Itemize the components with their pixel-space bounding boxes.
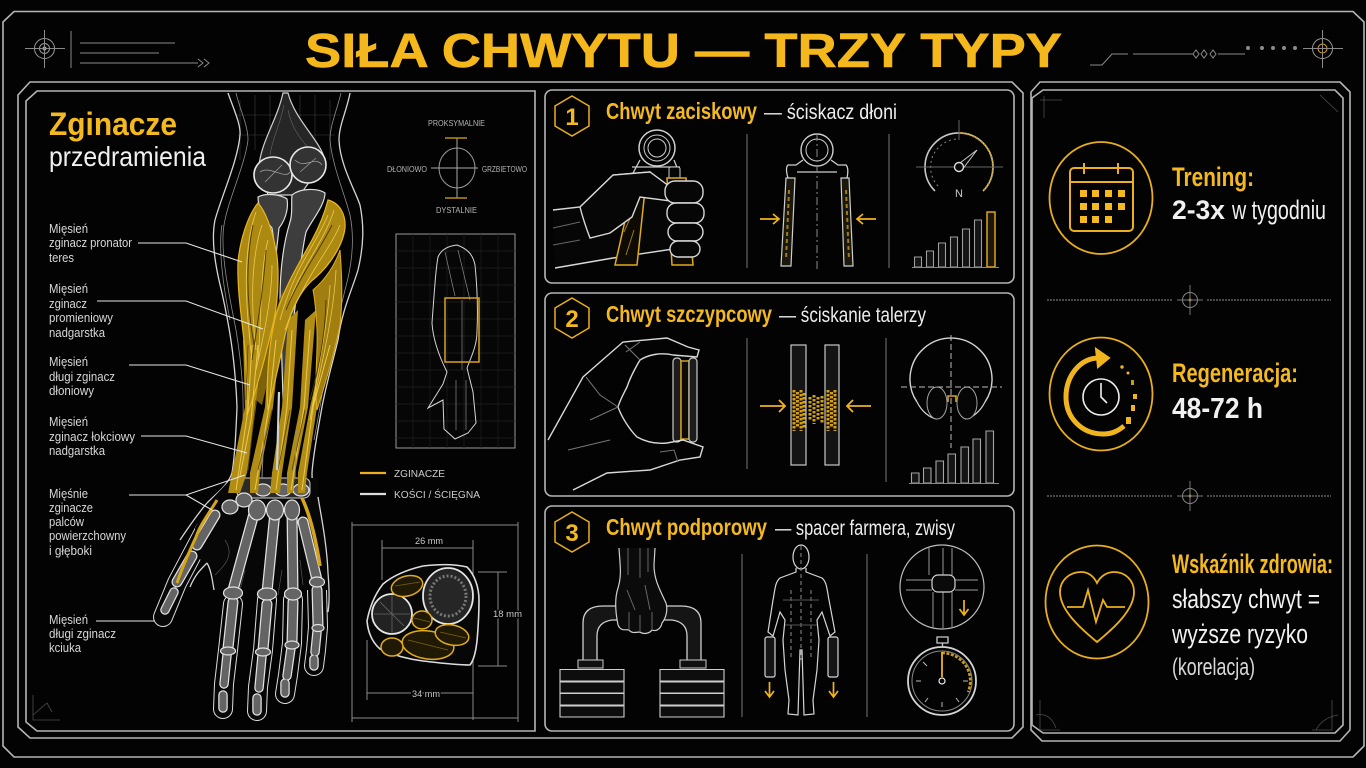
anatomical labels: dłoniowy (49, 384, 95, 398)
anatomical labels: zginacz pronator (49, 236, 132, 250)
title: SIŁA CHWYTU — TRZY TYPY (305, 25, 1062, 78)
legend: KOŚCI / ŚCIĘGNA (394, 488, 480, 501)
badge 2 (555, 298, 589, 338)
legend: ZGINACZE (394, 468, 445, 480)
anatomical labels: zginacz łokciowy (49, 430, 136, 444)
icon: plate compression diagram (760, 345, 871, 465)
divider crosshair (1177, 285, 1203, 315)
icon: recovery clock (1050, 338, 1152, 450)
heading grip 2 (606, 301, 926, 327)
icon: fingertip circle detail (901, 335, 1002, 448)
main outer frame left and centre (18, 82, 1023, 738)
fact: training: w tygodniu (1231, 195, 1326, 225)
orientation compass: GRZBIETOWO (482, 165, 527, 174)
anatomical labels: Mięsień (49, 613, 88, 627)
anatomical forearm illustration (163, 93, 363, 711)
icon: farmer walk handles and weights (560, 548, 724, 717)
bar chart grip 2 (909, 431, 999, 484)
anatomical labels: Mięsień (49, 415, 88, 429)
panel: grip 3 support (545, 506, 1014, 731)
fact: recovery: 48-72 h (1172, 393, 1263, 425)
icon: fist on bar detail (900, 545, 984, 629)
orientation compass: DŁONIOWO (387, 165, 427, 174)
fact: health indicator: (korelacja) (1172, 654, 1255, 681)
anatomical labels: palców (49, 515, 85, 529)
heading grip 1: — ściskacz dłoni (764, 101, 897, 124)
heading: zginacze przedramienia (49, 106, 206, 172)
badge 1 (555, 96, 589, 136)
fact: health indicator: wyższe ryzyko (1171, 619, 1308, 649)
heading: zginacze przedramienia: Zginacze (49, 106, 177, 142)
badge 2: 2 (565, 306, 579, 333)
anatomical labels: zginacze (49, 501, 93, 515)
header decoration left (25, 30, 209, 68)
anatomical labels: nadgarstka (49, 326, 105, 340)
heading grip 2: Chwyt szczypcowy (606, 301, 772, 327)
badge 3 (555, 512, 589, 552)
anatomical labels: długi zginacz (49, 370, 115, 384)
anatomical labels: Mięsień (49, 222, 88, 236)
icon: calendar (1050, 142, 1152, 254)
anatomical labels (49, 222, 263, 655)
bar chart grip 1 (912, 212, 999, 268)
heading grip 3 (606, 514, 955, 540)
forearm cross-section with dimensions (352, 522, 522, 722)
gauge in newtons: N (955, 188, 963, 200)
orientation compass: DYSTALNIE (436, 206, 477, 215)
heading grip 1: Chwyt zaciskowy (606, 98, 757, 124)
legend (360, 468, 480, 501)
anatomical labels: długi zginacz (49, 627, 116, 641)
hand skeleton (163, 478, 329, 711)
heading grip 2: — ściskanie talerzy (779, 304, 926, 327)
anatomical labels: Mięsień (49, 282, 88, 296)
arm locator grid (396, 234, 515, 448)
divider crosshair (1177, 481, 1203, 511)
badge 3: 3 (565, 520, 579, 547)
heading: zginacze przedramienia: przedramienia (49, 141, 206, 172)
panel: grip 2 pinch (545, 293, 1014, 496)
anatomical labels: i głęboki (49, 544, 92, 558)
heading grip 3: Chwyt podporowy (606, 514, 767, 540)
panel: forearm anatomy (26, 91, 535, 731)
icon: human body with weights (765, 545, 838, 715)
header decoration right (1090, 30, 1343, 68)
forearm cross-section with dimensions: 18 mm (493, 609, 522, 620)
fact: health indicator (1171, 549, 1333, 681)
muscle: flexors (228, 200, 345, 493)
anatomical labels: nadgarstka (49, 444, 105, 458)
icon: hand squeezing gripper (553, 130, 704, 268)
corner ticks left panel (33, 695, 60, 720)
icon: heart with pulse (1046, 546, 1148, 658)
panel: key facts (1031, 82, 1350, 741)
fact: recovery (1172, 358, 1298, 425)
anatomical labels: zginacz (49, 297, 87, 311)
orientation compass (387, 119, 527, 215)
fact: health indicator: słabszy chwyt = (1172, 584, 1320, 614)
anatomical labels: promieniowy (49, 311, 114, 325)
anatomical labels: powierzchowny (49, 529, 127, 543)
anatomical labels: teres (49, 251, 74, 265)
gauge in newtons (916, 120, 1003, 200)
orientation compass: PROKSYMALNIE (428, 119, 485, 128)
forearm cross-section with dimensions: 26 mm (415, 536, 443, 547)
heading grip 3: — spacer farmera, zwisy (775, 517, 955, 540)
fact: training: 2-3x (1172, 195, 1225, 225)
fact: training: Trening: (1172, 162, 1254, 192)
badge 1: 1 (565, 104, 579, 131)
forearm cross-section with dimensions: 34 mm (412, 689, 440, 700)
anatomical labels: Mięśnie (49, 487, 88, 501)
fact: training (1172, 162, 1326, 225)
icon: hand pinching plates (548, 338, 703, 490)
fact: recovery: Regeneracja: (1172, 358, 1298, 388)
heading grip 1 (606, 98, 897, 124)
panel: grip 1 crush (545, 90, 1014, 283)
icon: gripper diagram (760, 133, 876, 272)
anatomical labels: kciuka (49, 641, 81, 655)
anatomical labels: Mięsień (49, 355, 88, 369)
icon: stopwatch (908, 637, 976, 715)
